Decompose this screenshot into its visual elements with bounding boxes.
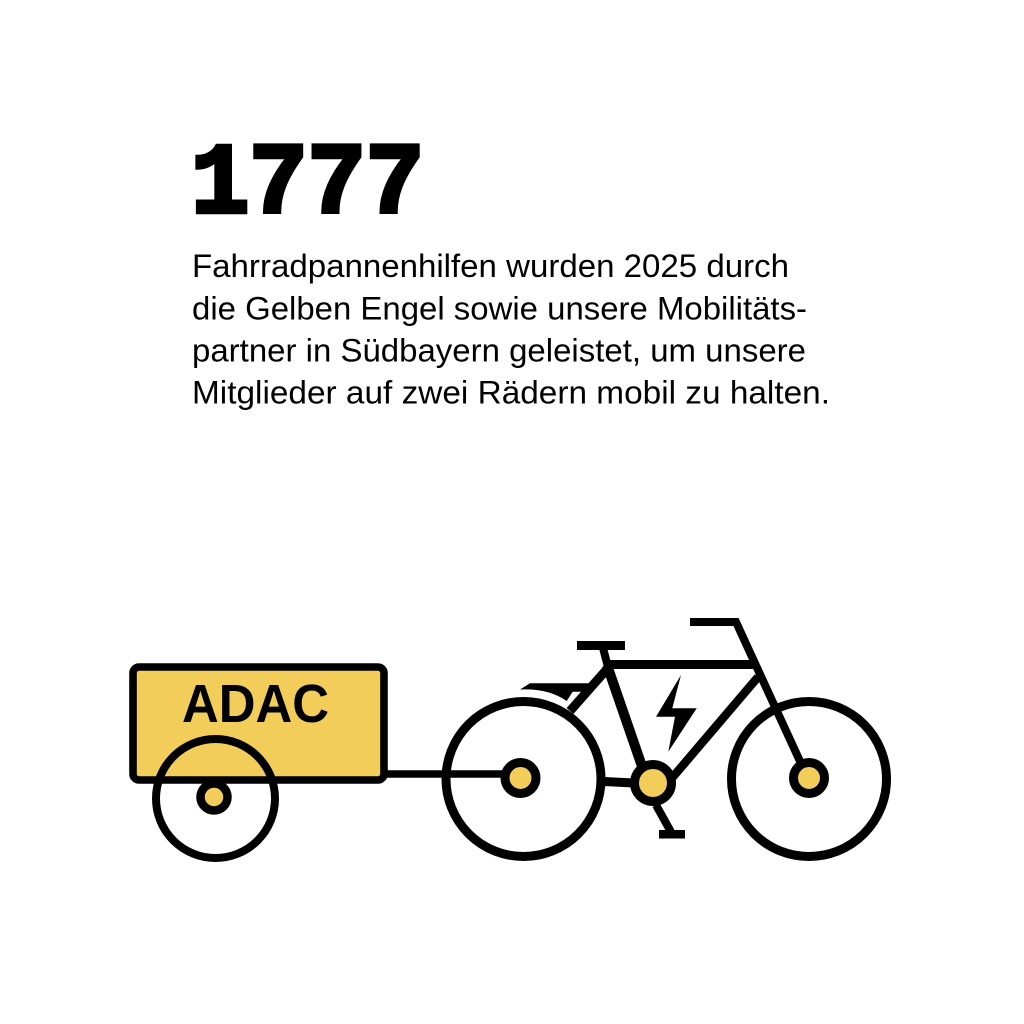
rear rack [520, 683, 590, 701]
description text [192, 248, 830, 410]
trailer ADAC label: ADAC [182, 674, 329, 734]
description text: partner in Südbayern geleistet, um unsere [192, 332, 806, 368]
trailer box [133, 667, 384, 780]
bike frame [570, 622, 804, 832]
rear wheel [446, 702, 601, 856]
illustration: e-bike with ADAC trailer [133, 622, 886, 858]
rear hub [505, 762, 536, 794]
pedal [659, 830, 685, 838]
icon: lightning bolt [656, 675, 697, 752]
trailer wheel hub [200, 784, 228, 810]
trailer wheel [156, 739, 275, 858]
saddle [577, 641, 625, 650]
description text: Fahrradpannenhilfen wurden 2025 durch [192, 248, 789, 284]
crank hub [634, 764, 672, 802]
description text: Mitglieder auf zwei Rädern mobil zu halten. [192, 374, 830, 410]
headline number: 1777 [191, 130, 424, 243]
trailer drawbar [384, 770, 510, 778]
front hub [794, 762, 824, 794]
front wheel [732, 702, 886, 856]
description text: die Gelben Engel sowie unsere Mobilitäts- [192, 290, 807, 326]
